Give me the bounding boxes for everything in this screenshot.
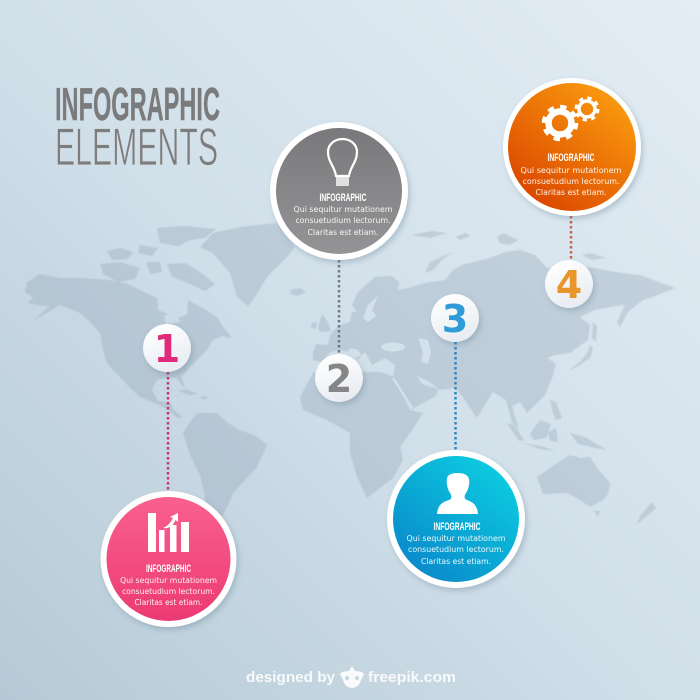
orange body text: Claritas est etiam. (536, 188, 606, 197)
pink body text: Qui sequitur mutationem (120, 576, 217, 585)
credit text: designed by: designed by (246, 670, 335, 686)
number badge 1: 1 (154, 327, 180, 371)
pink body text: Claritas est etiam. (134, 598, 202, 607)
panel: blue step 3 (387, 450, 525, 588)
panel: orange step 4 (503, 78, 641, 216)
icon: freepik mascot (340, 666, 364, 688)
orange heading: INFOGRAPHIC (548, 152, 595, 164)
credit text: freepik.com: freepik.com (368, 670, 456, 686)
title line: ELEMENTS: ELEMENTS (55, 118, 218, 177)
gray body text: Claritas est etiam. (308, 228, 378, 237)
icon: gears (544, 98, 598, 139)
connector 1 (167, 372, 169, 493)
blue heading: INFOGRAPHIC (434, 521, 481, 533)
connector 4 (570, 216, 572, 260)
world map (25, 223, 675, 525)
orange circle (503, 78, 641, 216)
pink circle (100, 491, 236, 627)
orange body text: Qui sequitur mutationem (520, 166, 622, 175)
panel: gray step 2 (270, 122, 408, 260)
number badge 1 (143, 324, 191, 372)
number badge 4 (545, 260, 593, 308)
icon: person (437, 473, 478, 514)
number badge 4: 4 (556, 263, 582, 307)
pink heading: INFOGRAPHIC (146, 563, 191, 575)
orange body text: consuetudium lectorum. (522, 177, 620, 186)
number badge 2 (315, 354, 363, 402)
number badge 3 (431, 294, 479, 342)
blue circle (387, 450, 525, 588)
pink body text (120, 576, 217, 607)
gray body text (294, 205, 392, 237)
gray heading: INFOGRAPHIC (320, 192, 367, 204)
gray circle (270, 122, 408, 260)
number badge 3: 3 (442, 297, 468, 341)
title (55, 78, 220, 177)
title line: INFOGRAPHIC: INFOGRAPHIC (55, 78, 220, 130)
icon: bar chart (148, 513, 189, 552)
gray body text: Qui sequitur mutationem (294, 205, 392, 214)
blue body text: Claritas est etiam. (421, 557, 491, 566)
panel: pink step 1 (100, 491, 236, 627)
number badge 2: 2 (326, 357, 352, 401)
icon: light bulb (328, 139, 357, 186)
pink body text: consuetudium lectorum. (122, 587, 215, 596)
connector 3 (454, 342, 457, 450)
blue body text: consuetudium lectorum. (408, 545, 504, 554)
blue body text (406, 534, 506, 566)
blue body text: Qui sequitur mutationem (406, 534, 506, 543)
connector 2 (338, 260, 340, 354)
gray body text: consuetudium lectorum. (296, 216, 390, 225)
orange body text (520, 166, 622, 197)
footer credit (246, 666, 456, 688)
